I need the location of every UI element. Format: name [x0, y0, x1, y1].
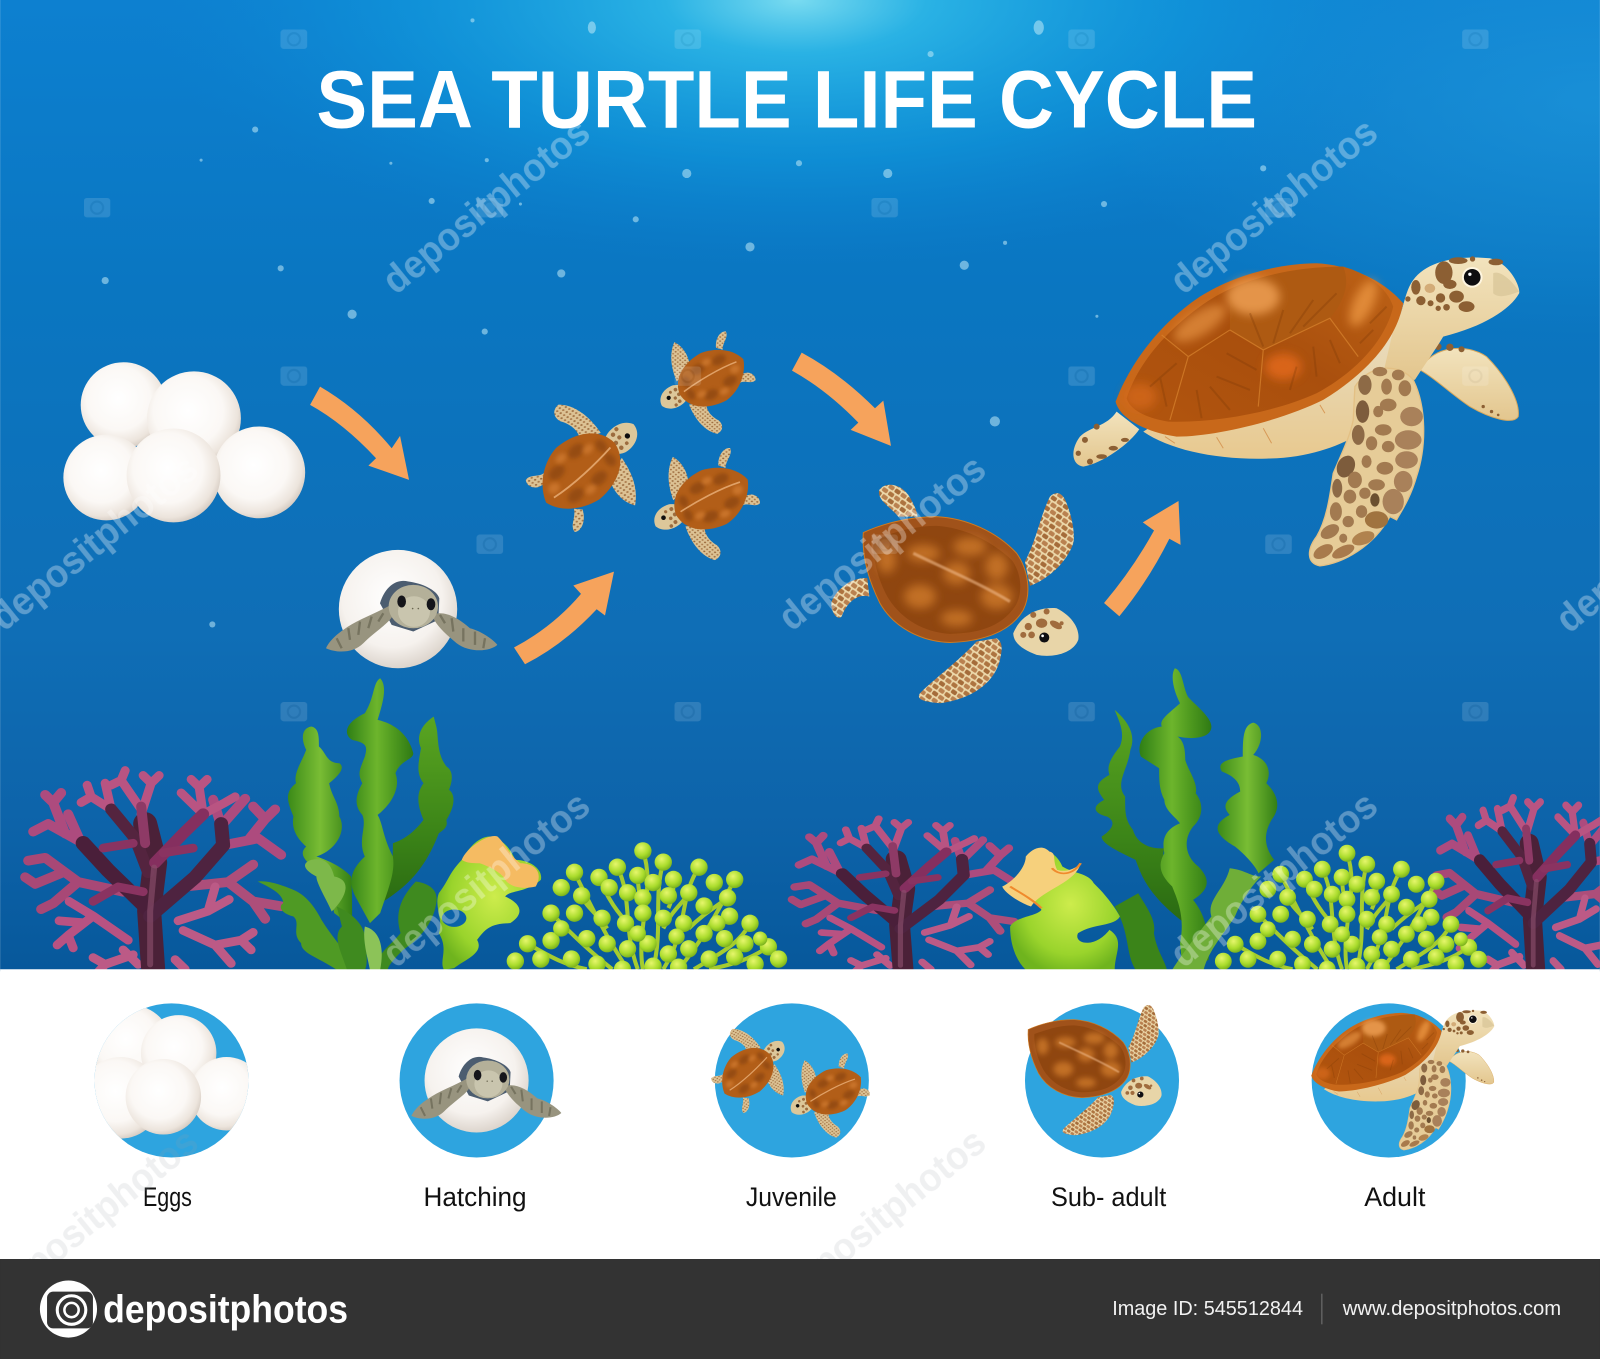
seaweed left — [258, 678, 453, 970]
title: SEA TURTLE LIFE CYCLE — [316, 55, 1257, 146]
eggs illustration — [63, 362, 305, 522]
legend: hatching — [400, 1003, 561, 1212]
legend: sub-adult — [1025, 1003, 1179, 1212]
legend: eggs — [94, 1003, 249, 1212]
watermarks: depositphotos — [1162, 784, 1386, 976]
arrow: eggs to hatching — [310, 387, 409, 480]
depositphotos logo — [40, 1280, 348, 1338]
arrow: hatching to juvenile — [514, 572, 614, 664]
camera watermark icons — [84, 30, 1489, 721]
website url: www.depositphotos.com — [1342, 1298, 1561, 1320]
watermarks on white panel — [0, 1120, 994, 1313]
watermarks: depositphotos — [1162, 110, 1386, 303]
watermarks: depositphotos — [375, 784, 598, 976]
legend: juvenile — [695, 1003, 881, 1212]
hatching egg illustration — [326, 550, 497, 668]
arrow: juvenile to sub-adult — [792, 353, 891, 446]
label: adult: Adult — [1364, 1182, 1426, 1212]
coral left — [25, 771, 281, 973]
bubbles — [102, 18, 1266, 627]
label: hatching: Hatching — [424, 1182, 527, 1212]
sea grapes right — [1215, 845, 1487, 978]
arrow: sub-adult to adult — [1104, 501, 1181, 616]
watermarks — [0, 110, 1600, 976]
watermarks on white panel: depositphotos — [770, 1120, 994, 1313]
label: juvenile: Juvenile — [746, 1182, 837, 1212]
ocean background — [0, 0, 1600, 971]
label: sub-adult: Sub- adult — [1051, 1182, 1167, 1212]
white legend panel — [0, 969, 1600, 1259]
juvenile turtles — [501, 316, 775, 577]
adult turtle — [1073, 256, 1519, 566]
watermarks: depositphotos — [375, 110, 598, 303]
watermarks: depositphotos — [770, 447, 994, 640]
legend: adult — [1311, 1003, 1494, 1212]
lettuce algae right — [1002, 848, 1120, 970]
sub-adult turtle — [831, 485, 1079, 703]
image id: Image ID: 545512844 — [1112, 1298, 1303, 1320]
seaweed right — [1096, 668, 1277, 970]
lettuce algae left — [437, 836, 541, 970]
sea grapes left — [507, 842, 787, 978]
coral middle — [792, 819, 1014, 972]
depositphotos logo: depositphotos — [103, 1288, 348, 1331]
footer bar — [0, 1259, 1600, 1359]
coral right — [1434, 798, 1600, 973]
label: eggs: Eggs — [143, 1182, 192, 1212]
